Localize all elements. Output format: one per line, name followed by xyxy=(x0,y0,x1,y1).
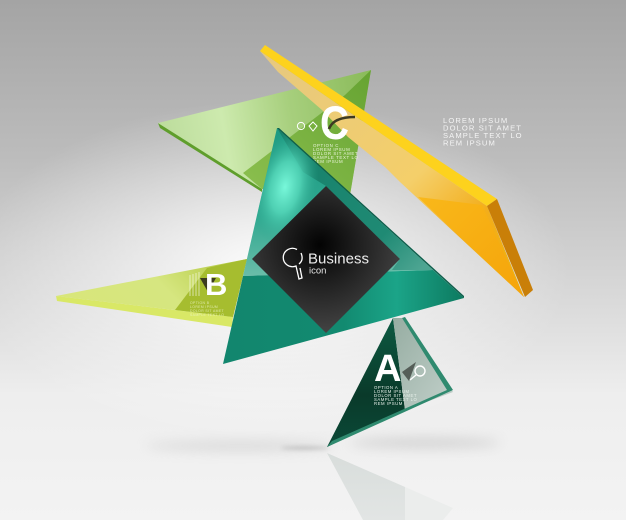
background glow xyxy=(0,100,570,440)
text block: lorem ipsum: SAMPLE TEXT LO xyxy=(443,131,523,140)
text block: lorem ipsum: REM IPSUM xyxy=(443,138,496,148)
icon: circle and diamond xyxy=(297,122,317,131)
panel: main teal triangle xyxy=(223,124,464,364)
teal top-right edge xyxy=(277,128,464,298)
text block: lorem ipsum: DOLOR SIT AMET xyxy=(443,124,522,132)
triangle A light side xyxy=(393,318,453,410)
reflection of triangle A xyxy=(327,453,453,520)
icon: key / lightbulb xyxy=(283,248,302,279)
triangle C darker fold xyxy=(243,70,371,195)
triangle A edges xyxy=(327,317,453,447)
label: Business: Business xyxy=(308,250,369,268)
option B text: DOLOR SIT AMET xyxy=(190,309,224,313)
teal lower band xyxy=(223,270,464,364)
option A text xyxy=(374,385,418,406)
yellow face xyxy=(260,51,524,297)
label: icon: icon xyxy=(309,266,326,276)
yellow top edge xyxy=(260,45,497,206)
triangle B darker fold xyxy=(175,259,247,317)
teal mint highlight xyxy=(258,138,314,228)
option C text: LOREM IPSUM xyxy=(313,147,350,152)
panel: triangle B xyxy=(56,259,247,327)
letter B: B xyxy=(205,267,227,302)
option A text: REM IPSUM xyxy=(374,401,403,406)
yellow lower fold xyxy=(418,197,524,297)
option C text: DOLOR SIT AMET xyxy=(313,151,358,156)
icon: stripes xyxy=(190,272,199,296)
teal upper face xyxy=(243,128,433,276)
option C text xyxy=(313,143,359,164)
black diamond xyxy=(252,186,400,333)
option A text: OPTION A xyxy=(374,385,398,390)
option A text: LOREM IPSUM xyxy=(374,389,410,394)
floor shadow xyxy=(145,438,500,451)
option B text xyxy=(190,301,224,317)
triangle C face xyxy=(158,70,371,195)
text block: lorem ipsum xyxy=(443,116,523,148)
option B text: OPTION B xyxy=(190,301,210,305)
panel: triangle A xyxy=(327,317,453,447)
panel: C labels xyxy=(297,96,359,164)
triangle C thickness xyxy=(158,123,262,192)
letter A: A xyxy=(374,348,401,390)
option C text: OPTION C xyxy=(313,143,339,148)
icon: dark shape behind B xyxy=(200,278,216,292)
letter C: C xyxy=(320,96,349,149)
yellow side edge xyxy=(487,199,533,297)
option A text: DOLOR SIT AMET xyxy=(374,393,417,398)
panel: triangle C xyxy=(158,70,371,195)
option B text: SAMPLE TEXT LO xyxy=(190,313,224,317)
C icon stroke xyxy=(329,117,355,129)
icon: dark arrow near A xyxy=(402,362,416,381)
teal dark strip along upper right xyxy=(277,128,433,270)
triangle B face xyxy=(56,259,247,317)
option A text: SAMPLE TEXT LO xyxy=(374,397,418,402)
text block: lorem ipsum: LOREM IPSUM xyxy=(443,116,508,125)
triangle B thickness xyxy=(56,296,233,327)
icon: magnifier xyxy=(410,366,425,380)
triangle A dark side xyxy=(327,318,405,447)
option C text: SAMPLE TEXT LO xyxy=(313,155,359,160)
panel: yellow triangle xyxy=(260,45,533,297)
option C text: REM IPSUM xyxy=(313,159,343,164)
option B text: LOREM IPSUM xyxy=(190,305,218,309)
